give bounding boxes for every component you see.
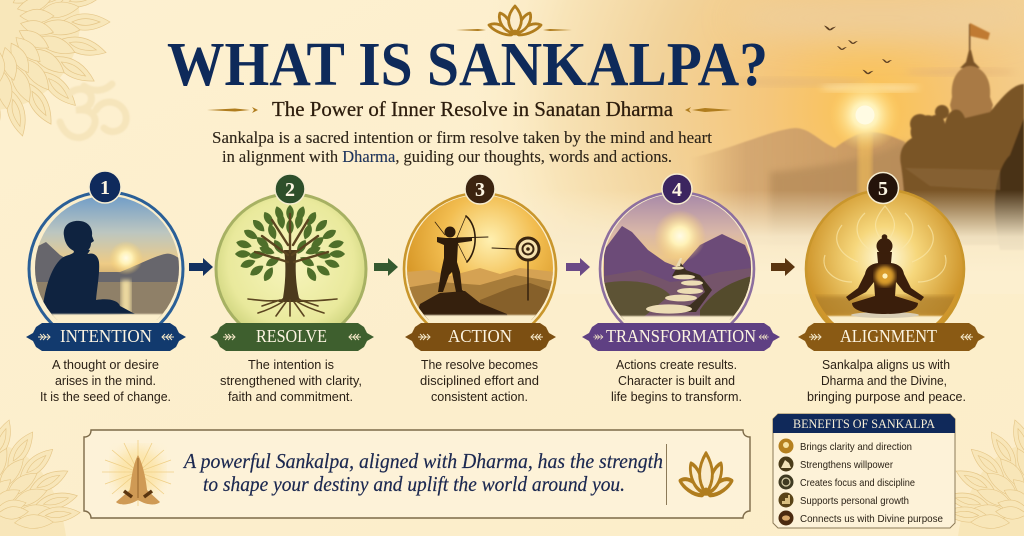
number badge 1: 1 bbox=[100, 177, 110, 199]
illustration: archer and target bbox=[402, 193, 558, 323]
number badge 5 bbox=[868, 172, 898, 204]
text: callout quote bbox=[182, 449, 663, 496]
decorative corner mandala bottom right bbox=[943, 413, 1024, 536]
ribbon: resolve: RESOLVE bbox=[256, 326, 327, 346]
number badge 2 bbox=[275, 174, 305, 204]
benefit 5 bbox=[778, 510, 943, 526]
text: intention description bbox=[40, 357, 171, 404]
benefit 2: Strengthens willpower bbox=[800, 459, 893, 471]
distant light shaft bbox=[858, 122, 872, 194]
text: resolve description: faith and commitment. bbox=[228, 389, 353, 404]
step 4 transformation bbox=[582, 174, 780, 404]
decorative corner mandala bottom left bbox=[0, 413, 81, 536]
benefits heading: BENEFITS OF SANKALPA bbox=[793, 417, 935, 431]
benefit 2 bbox=[778, 456, 893, 472]
text: alignment description: Sankalpa aligns us with bbox=[822, 357, 950, 372]
text: resolve description: strengthened with clarity, bbox=[220, 373, 362, 388]
benefit 3: Creates focus and discipline bbox=[800, 477, 915, 489]
ribbon: resolve bbox=[210, 323, 374, 351]
benefits heading bbox=[773, 414, 955, 433]
number badge 4: 4 bbox=[672, 179, 682, 201]
ribbon: action: ACTION bbox=[448, 326, 512, 346]
step 2 resolve bbox=[210, 174, 374, 404]
text: action description: disciplined effort and bbox=[420, 373, 539, 388]
river fog bbox=[470, 190, 1024, 294]
text: resolve description: The intention is bbox=[248, 357, 334, 372]
mountains bbox=[690, 128, 915, 245]
text: alignment description: Dharma and the Divine, bbox=[821, 373, 947, 388]
top lotus ornament bbox=[456, 6, 572, 35]
text: callout quote: to shape your destiny and uplift the world around you. bbox=[203, 472, 625, 496]
title: WHAT IS SANKALPA? bbox=[167, 31, 768, 99]
intro text bbox=[212, 128, 712, 166]
panel: benefits of sankalpa bbox=[773, 414, 955, 528]
text: resolve description bbox=[220, 357, 362, 404]
ribbon: transformation: TRANSFORMATION bbox=[606, 326, 756, 346]
benefit 1 bbox=[778, 438, 912, 454]
number badge 3 bbox=[465, 174, 495, 204]
benefit 3 bbox=[778, 474, 915, 490]
intro text: Sankalpa is a sacred intention or firm resolve taken by the mind and heart bbox=[212, 128, 712, 147]
text: alignment description: bringing purpose and peace. bbox=[807, 389, 966, 404]
text: transformation description bbox=[611, 357, 742, 404]
temple and trees bbox=[900, 23, 1024, 250]
ribbon: transformation bbox=[582, 323, 780, 351]
ribbon: intention: INTENTION bbox=[60, 326, 152, 346]
number badge 5: 5 bbox=[878, 178, 888, 200]
decorative corner mandala top left bbox=[0, 0, 110, 140]
sun bbox=[829, 79, 901, 151]
subtitle with flourishes: The Power of Inner Resolve in Sanatan Dharma bbox=[272, 97, 674, 121]
arrow 4 to 5 bbox=[771, 258, 795, 276]
number badge 1 bbox=[89, 171, 121, 203]
callout panel bbox=[84, 430, 750, 518]
ribbon: action bbox=[405, 323, 556, 351]
text: intention description: arises in the mind. bbox=[55, 373, 156, 388]
number badge 4 bbox=[662, 174, 692, 204]
benefit 5: Connects us with Divine purpose bbox=[800, 513, 943, 525]
illustration: meditating figure bbox=[804, 190, 966, 323]
benefit 4 bbox=[778, 492, 909, 508]
arrow 3 to 4 bbox=[566, 258, 590, 276]
text: transformation description: Actions create results. bbox=[616, 357, 737, 372]
text: alignment description bbox=[807, 357, 966, 404]
intro text: in alignment with Dharma, guiding our thoughts, words and actions. bbox=[222, 147, 672, 166]
benefit 1: Brings clarity and direction bbox=[800, 441, 912, 453]
text: transformation description: Character is built and bbox=[618, 373, 735, 388]
icon: callout lotus bbox=[680, 453, 732, 495]
ribbon: alignment bbox=[798, 323, 985, 351]
text: callout quote: A powerful Sankalpa, aligned with Dharma, has the strength bbox=[182, 449, 663, 473]
ribbon: alignment: ALIGNMENT bbox=[840, 326, 937, 346]
ribbon: intention bbox=[26, 323, 186, 351]
illustration: tree with roots bbox=[216, 194, 366, 344]
number badge 2: 2 bbox=[285, 179, 295, 201]
arrow 1 to 2 bbox=[189, 258, 213, 276]
text: action description: consistent action. bbox=[431, 389, 528, 404]
text: intention description: It is the seed of change. bbox=[40, 389, 171, 404]
text: transformation description: life begins to transform. bbox=[611, 389, 742, 404]
step 1 intention bbox=[26, 171, 186, 404]
step 5 alignment bbox=[798, 172, 985, 404]
icon: praying hands bbox=[102, 440, 174, 506]
step 3 action bbox=[404, 174, 556, 404]
text: intention description: A thought or desire bbox=[52, 357, 159, 372]
sunset temple landscape photo bbox=[470, 0, 1024, 294]
icon: faint om symbol bbox=[60, 84, 126, 138]
illustration: thinker at sunrise bbox=[28, 192, 184, 323]
text: action description bbox=[420, 357, 539, 404]
illustration: stone path to sunrise bbox=[598, 192, 756, 323]
benefit 4: Supports personal growth bbox=[800, 495, 909, 507]
arrow 2 to 3 bbox=[374, 258, 398, 276]
birds bbox=[824, 26, 892, 74]
number badge 3: 3 bbox=[475, 179, 485, 201]
text: action description: The resolve becomes bbox=[421, 357, 538, 372]
